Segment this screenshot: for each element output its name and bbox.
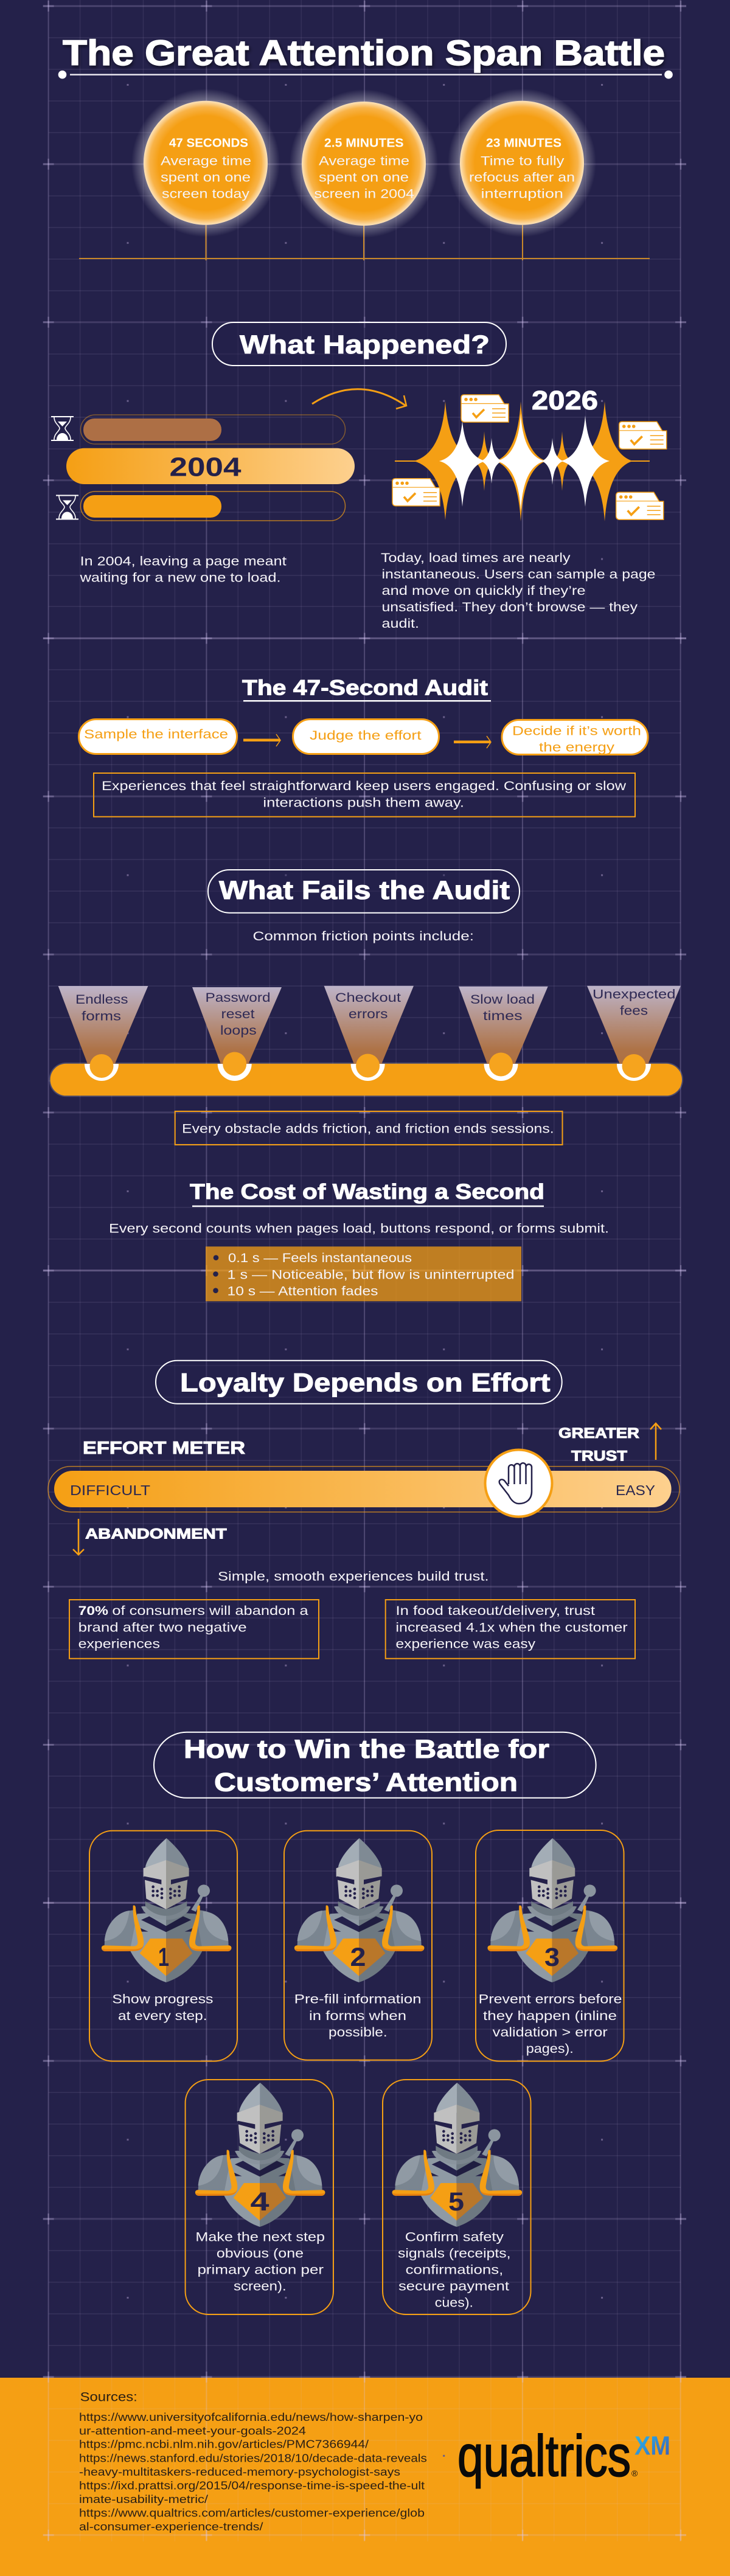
stat circle: 23 minutes: Time to fully <box>481 154 565 168</box>
friction point: unexpected fees: fees <box>620 1004 648 1018</box>
friction point: checkout errors: Checkout <box>335 991 401 1005</box>
icon: hourglass bottom <box>56 495 78 519</box>
label: effort meter: EFFORT METER <box>83 1439 245 1458</box>
label: 2026: 2026 <box>532 386 598 415</box>
friction point: password reset loops: reset <box>221 1007 255 1021</box>
panel: timing list <box>206 1246 521 1301</box>
heading: What Fails the Audit: What Fails the Audit <box>219 876 510 905</box>
logo: qualtrics XM: XM <box>634 2431 670 2461</box>
callout: every obstacle: Every obstacle adds friction, and friction ends sessions. <box>182 1122 554 1136</box>
card 3: prevent errors <box>476 1830 624 2061</box>
stat circle: 23 minutes: refocus after an <box>469 171 575 185</box>
label: greater trust: GREATER <box>558 1425 639 1442</box>
friction point: endless forms <box>58 986 148 1081</box>
callout: experiences: Experiences that feel straightforward keep users engaged. Confusing or slow <box>102 779 627 793</box>
card 3: prevent errors: 3 <box>544 1943 560 1972</box>
stat circle: 23 minutes <box>448 89 596 237</box>
step: judge the effort <box>293 719 439 754</box>
progress bar top <box>80 415 346 444</box>
card 3: prevent errors: they happen (inline <box>483 2009 617 2023</box>
heading: The 47-Second Audit: The 47-Second Audit <box>242 676 488 700</box>
arrow: 2004 to 2026 <box>312 389 406 409</box>
card 4: next step: screen). <box>234 2280 287 2294</box>
label: abandonment: ABANDONMENT <box>85 1526 227 1542</box>
text: 2004 description: waiting for a new one to load. <box>79 571 281 585</box>
friction point: slow load times <box>459 987 548 1081</box>
sources: ur-attention-and-meet-your-goals-2024 <box>79 2424 306 2437</box>
heading: How to Win the Battle: Customers’ Attention <box>214 1768 518 1797</box>
connector lines under stat circles <box>79 225 650 260</box>
sources: Sources: <box>80 2390 137 2404</box>
heading: Loyalty Depends on Effort <box>156 1361 562 1404</box>
text: 2004 description <box>79 554 287 585</box>
stat circle: 2.5 minutes <box>290 89 438 238</box>
card 5: confirm safety <box>383 2080 530 2314</box>
card 5: confirm safety: secure payment <box>398 2280 509 2294</box>
sources <box>79 2390 427 2533</box>
stat circle: 47 seconds <box>131 89 280 237</box>
icon: hourglass top <box>51 416 74 441</box>
step: sample the interface: Sample the interface <box>84 727 228 741</box>
sources: https://pmc.ncbi.nlm.nih.gov/articles/PMC7366944/ <box>79 2438 369 2451</box>
stat circle: 47 seconds: spent on one <box>161 171 251 185</box>
stat circle: 2.5 minutes: 2.5 MINUTES <box>324 136 404 150</box>
logo: qualtrics XM: ® <box>631 2468 638 2478</box>
arrow <box>454 736 491 748</box>
friction point: endless forms: Endless <box>75 993 128 1007</box>
waveform of sparkles <box>395 401 650 521</box>
icon: hand slider <box>485 1450 552 1517</box>
friction point: unexpected fees <box>587 986 681 1081</box>
arrow <box>243 734 280 746</box>
progress bar bottom <box>80 491 346 521</box>
friction point: password reset loops: Password <box>206 991 270 1005</box>
heading: What Happened? <box>212 322 506 366</box>
2004 bar: 2004 <box>169 453 242 482</box>
arrow: down <box>73 1519 84 1555</box>
step: sample the interface <box>79 719 237 754</box>
arrow: up <box>650 1423 661 1460</box>
sources: imate-usability-metric/ <box>79 2493 209 2505</box>
effort meter: DIFFICULT <box>70 1482 150 1498</box>
card 4: next step: obvious (one <box>217 2247 304 2261</box>
heading: How to Win the Battle <box>154 1732 596 1798</box>
panel: timing list: 10 s — Attention fades <box>228 1284 378 1298</box>
stat circle: 47 seconds: Average time <box>161 154 251 168</box>
footer band <box>0 2378 730 2576</box>
text: today description <box>381 551 656 631</box>
stat circle: 23 minutes: interruption <box>481 187 563 201</box>
text: today description: instantaneous. Users can sample a page <box>382 568 656 582</box>
callout: experiences <box>94 773 635 817</box>
card 4: next step: 4 <box>251 2188 269 2217</box>
text: today description: and move on quickly if they’re <box>382 584 585 598</box>
friction point: password reset loops <box>192 987 282 1081</box>
sources: al-consumer-experience-trends/ <box>79 2520 263 2533</box>
card 3: prevent errors: Prevent errors before <box>479 1993 622 2007</box>
text: every second counts: Every second counts when pages load, buttons respond, or forms submit. <box>109 1222 609 1236</box>
callout: food takeout: experience was easy <box>395 1637 536 1651</box>
icon: browser window 2 <box>619 422 667 449</box>
card 3: prevent errors: pages). <box>526 2042 574 2056</box>
sources: https://ixd.prattsi.org/2015/04/response-time-is-speed-the-ult <box>79 2479 425 2491</box>
friction point: checkout errors <box>324 986 414 1081</box>
card 1: show progress <box>89 1831 237 2061</box>
heading: What Happened?: What Happened? <box>240 330 490 359</box>
text: today description: audit. <box>382 617 419 631</box>
stat circle: 2.5 minutes: screen in 2004 <box>314 187 414 201</box>
icon: browser window 4 <box>616 492 664 519</box>
step: decide if worth the energy: Decide if it’s worth <box>512 724 641 738</box>
text: 2004 description: In 2004, leaving a page meant <box>80 554 287 568</box>
stat circle: 23 minutes: 23 MINUTES <box>486 136 561 150</box>
heading: Loyalty Depends on Effort: Loyalty Depends on Effort <box>180 1369 551 1398</box>
card 2: pre-fill: 2 <box>350 1943 366 1972</box>
card 3: prevent errors: validation > error <box>493 2026 608 2040</box>
text: today description: Today, load times are nearly <box>381 551 571 565</box>
card 2: pre-fill: Pre-fill information <box>294 1993 422 2007</box>
card 1: show progress: at every step. <box>118 2009 207 2023</box>
card 4: next step <box>186 2080 333 2314</box>
panel: timing list: 0.1 s — Feels instantaneous <box>228 1251 412 1265</box>
card 5: confirm safety: Confirm safety <box>405 2230 504 2244</box>
card 4: next step: primary action per <box>197 2263 324 2277</box>
stat circle: 2.5 minutes: spent on one <box>319 171 409 185</box>
sources: -heavy-multitaskers-reduced-memory-psychologist-says <box>79 2465 400 2478</box>
card 5: confirm safety: cues). <box>435 2296 473 2310</box>
logo: qualtrics XM: qualtrics <box>457 2424 631 2489</box>
friction point: slow load times: Slow load <box>470 993 535 1007</box>
sources: https://www.qualtrics.com/articles/customer-experience/glob <box>79 2506 425 2519</box>
friction point: unexpected fees: Unexpected <box>593 988 675 1002</box>
effort meter <box>48 1450 680 1517</box>
panel: timing list: 1 s — Noticeable, but flow is uninterrupted <box>228 1268 515 1282</box>
callout: 70 percent: of consumers will abandon a <box>112 1604 308 1618</box>
stat circle: 47 seconds: screen today <box>162 187 250 201</box>
effort meter: EASY <box>616 1482 655 1498</box>
card 5: confirm safety: signals (receipts, <box>398 2247 511 2261</box>
callout: experiences: interactions push them away. <box>263 796 464 810</box>
step: decide if worth the energy <box>502 720 648 755</box>
friction point: slow load times: times <box>483 1009 523 1023</box>
callout: food takeout: increased 4.1x when the customer <box>395 1620 628 1634</box>
label: greater trust: TRUST <box>571 1448 627 1465</box>
callout: food takeout: In food takeout/delivery, trust <box>395 1604 595 1618</box>
callout: 70 percent: experiences <box>78 1637 160 1651</box>
heading: How to Win the Battle: How to Win the Battle for <box>184 1735 549 1764</box>
card 2: pre-fill: possible. <box>328 2026 388 2040</box>
friction point: checkout errors: errors <box>349 1007 388 1021</box>
heading: The Cost of Wasting a Second: The Cost of Wasting a Second <box>190 1180 544 1204</box>
friction bar <box>49 1063 683 1097</box>
card 4: next step: Make the next step <box>195 2230 325 2244</box>
heading: What Fails the Audit <box>208 870 520 913</box>
card 2: pre-fill <box>284 1831 432 2060</box>
card 5: confirm safety: confirmations, <box>406 2263 503 2277</box>
card 2: pre-fill: in forms when <box>309 2009 406 2023</box>
callout: 70 percent: 70% <box>78 1604 108 1618</box>
icon: browser window 3 <box>392 479 440 506</box>
step: decide if worth the energy: the energy <box>539 741 615 755</box>
friction point: endless forms: forms <box>82 1009 121 1023</box>
icon: browser window 1 <box>461 395 509 422</box>
callout: every obstacle <box>175 1111 562 1145</box>
sources: https://www.universityofcalifornia.edu/news/how-sharpen-yo <box>79 2411 423 2423</box>
stat circle: 47 seconds: 47 SECONDS <box>169 136 248 150</box>
text: common friction points: Common friction points include: <box>253 929 474 943</box>
stat circle: 2.5 minutes: Average time <box>319 154 409 168</box>
callout: food takeout <box>386 1600 635 1659</box>
step: judge the effort: Judge the effort <box>310 729 422 743</box>
card 5: confirm safety: 5 <box>448 2188 464 2217</box>
title: The Great Attention Span Battle <box>63 33 665 73</box>
callout: 70 percent <box>69 1600 319 1659</box>
text: today description: unsatisfied. They don’t browse — they <box>382 600 638 614</box>
label: greater trust <box>558 1425 639 1465</box>
text: simple smooth experiences: Simple, smooth experiences build trust. <box>218 1569 489 1583</box>
2004 bar <box>66 448 355 484</box>
friction point: password reset loops: loops <box>220 1024 257 1038</box>
sources: https://news.stanford.edu/stories/2018/10/decade-data-reveals <box>79 2451 427 2464</box>
card 1: show progress: Show progress <box>112 1993 213 2007</box>
callout: 70 percent: brand after two negative <box>78 1620 247 1634</box>
card 1: show progress: 1 <box>158 1943 169 1972</box>
